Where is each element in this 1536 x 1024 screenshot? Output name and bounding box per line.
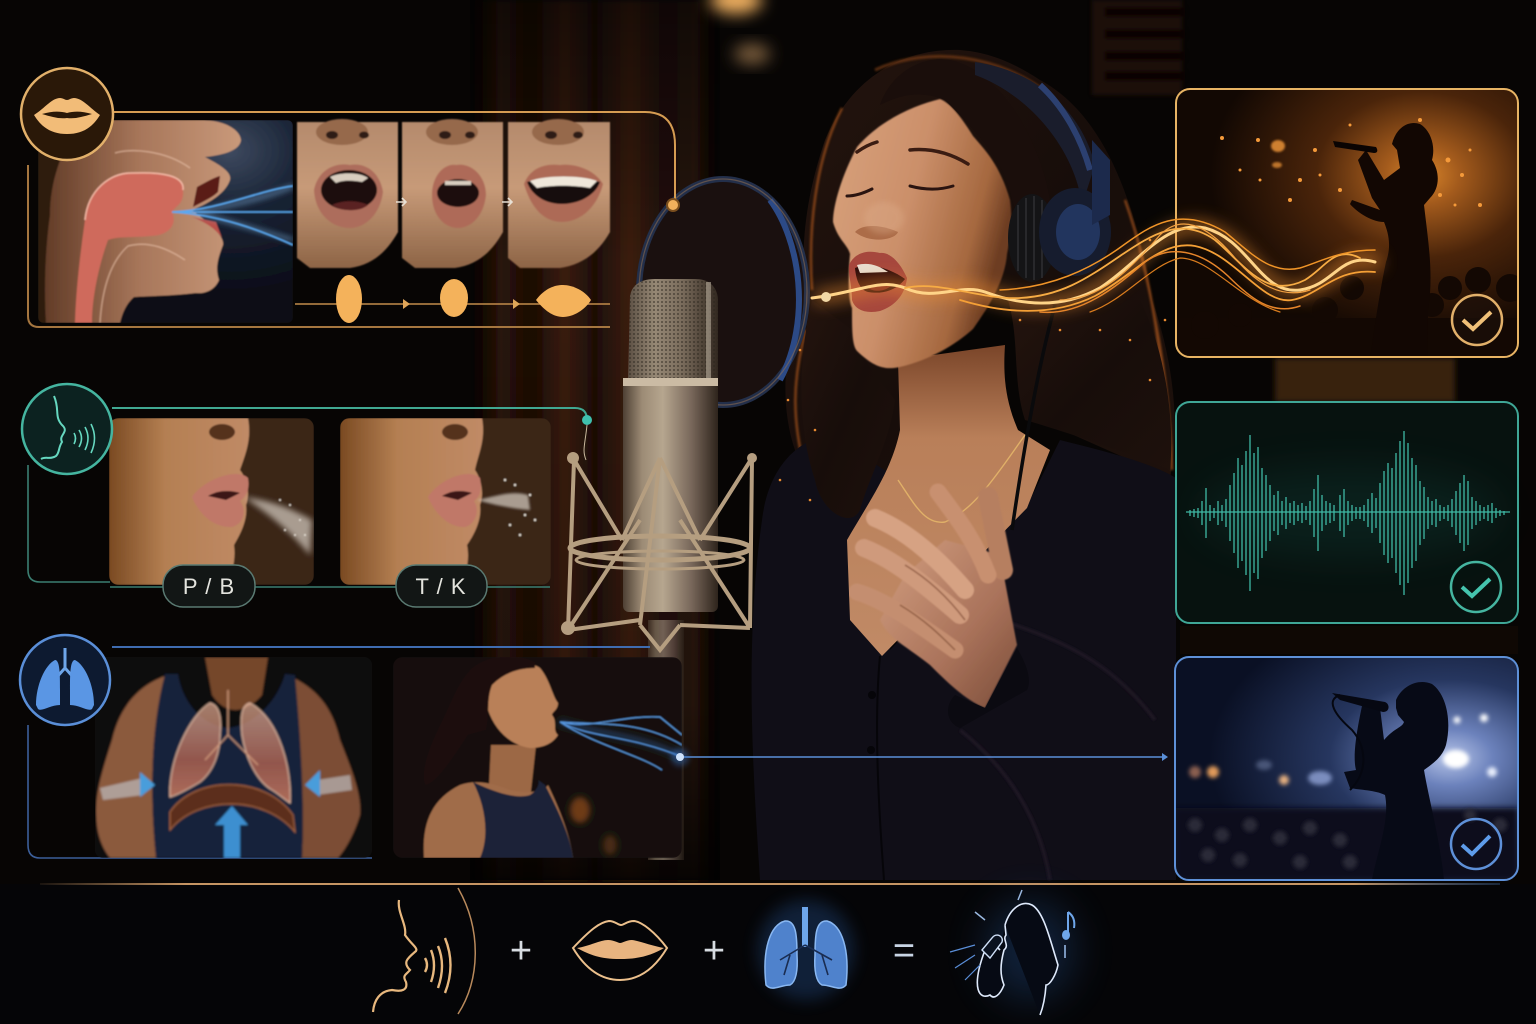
panel: breath support	[20, 635, 1168, 858]
panel border	[1175, 657, 1518, 880]
raised hand	[857, 492, 1017, 708]
panel: sound waveform	[1176, 402, 1518, 623]
warm stage glow	[1177, 90, 1517, 318]
mic stand	[648, 620, 684, 860]
cool stage glow	[1175, 657, 1518, 880]
label: P / B	[163, 565, 255, 607]
crowd	[1175, 808, 1518, 880]
connector dot	[582, 415, 592, 425]
arrow line to stage panel	[671, 748, 1168, 766]
neck and chest	[847, 345, 1050, 656]
icon: lungs	[758, 900, 854, 1000]
headphones	[975, 62, 1095, 205]
plosive photo P / B	[109, 418, 314, 585]
waveform	[1186, 431, 1510, 595]
face	[833, 99, 1011, 368]
arrows between mouth photos	[396, 198, 512, 206]
label: P / B: P / B	[183, 574, 235, 599]
panel: lip shaping	[21, 68, 679, 327]
panel: consonants	[22, 384, 592, 607]
shock mount	[563, 454, 755, 650]
chest and lungs photo	[95, 657, 372, 858]
equals: =	[893, 930, 915, 972]
divider	[40, 883, 1500, 885]
exhale profile photo	[393, 656, 682, 858]
singer silhouette	[1350, 123, 1438, 318]
equation: voice + lips + lungs = singer	[373, 888, 1075, 1015]
open mouth	[849, 252, 907, 312]
panel: stage result, cool	[1175, 657, 1518, 880]
icon: lips outline	[573, 921, 667, 980]
mouth shape photo: rounded	[402, 119, 503, 268]
singer silhouette	[1344, 682, 1448, 880]
connector dot	[667, 199, 679, 211]
golden voice wave from mouth to stage	[812, 219, 1375, 312]
mic grille	[623, 279, 718, 386]
check badge	[1452, 295, 1502, 345]
plosive photo T / K	[340, 418, 551, 585]
black cardigan body	[752, 435, 1176, 880]
nose	[855, 226, 898, 240]
panel frame and connector line	[28, 408, 587, 587]
icon: speaking head outline	[373, 888, 475, 1014]
icon: lips	[21, 68, 113, 160]
icon: lungs	[20, 635, 110, 725]
label: T / K	[396, 565, 487, 607]
icon: singer outline	[950, 890, 1075, 1015]
icon: speaking head	[22, 384, 112, 474]
panel: stage result, warm	[1176, 89, 1524, 360]
panel frame and connector line	[28, 112, 675, 327]
panel border	[1176, 89, 1518, 357]
singer portrait	[752, 50, 1176, 880]
brows and eyes	[857, 142, 968, 164]
crowd	[1293, 267, 1517, 328]
hair falling in front	[801, 300, 895, 518]
mouth shape photo: open vertical	[297, 119, 398, 268]
microphone with pop filter and shock mount	[563, 179, 807, 860]
cuff	[948, 648, 1029, 728]
panel frame and connector line	[28, 647, 650, 858]
stage lights	[1189, 714, 1497, 785]
check badge	[1451, 819, 1501, 869]
label: T / K: T / K	[415, 574, 467, 599]
plus: +	[510, 930, 532, 972]
check badge	[1451, 562, 1501, 612]
sparks around hair	[779, 239, 1166, 501]
vocal tract side view	[38, 120, 293, 323]
sparks	[1220, 118, 1482, 207]
mouth shape photo: wide smile	[508, 119, 610, 268]
plus: +	[703, 930, 725, 972]
pop filter	[639, 179, 807, 405]
lip shape diagram	[295, 275, 610, 323]
mic body	[623, 382, 718, 612]
headphone wire	[1012, 305, 1055, 530]
hair behind	[785, 50, 1175, 545]
